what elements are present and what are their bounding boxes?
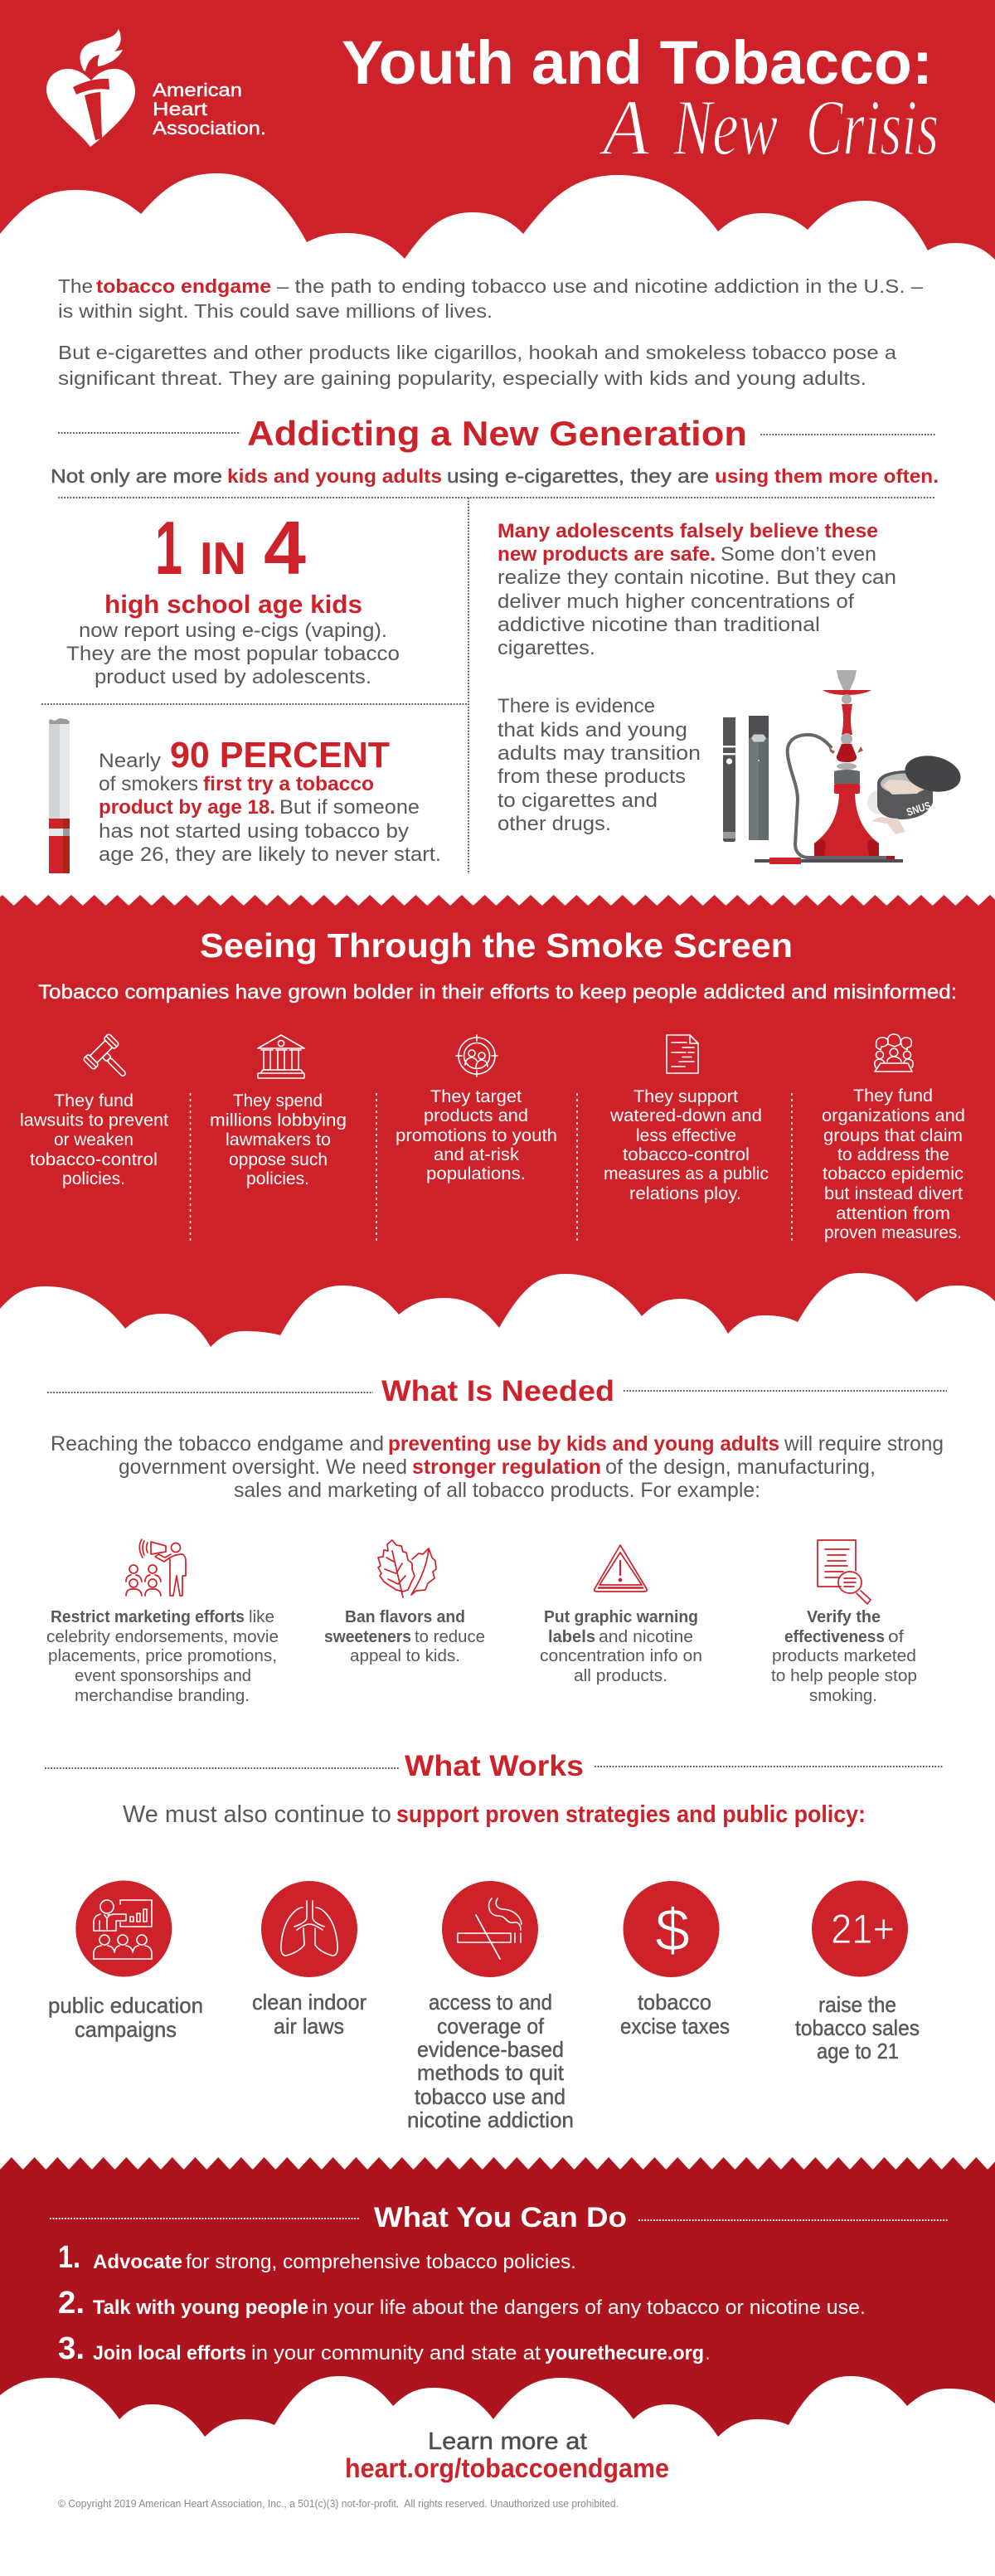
panel: seeing through the smoke screen (0, 895, 995, 1360)
text: column 5: groups that claim (823, 1126, 963, 1145)
list item 1 (58, 2240, 576, 2275)
text: graphic warning labels: and nicotine (599, 1628, 693, 1646)
text: column 2: policies. (246, 1169, 309, 1188)
subheading: using them more often. (715, 465, 939, 487)
icon: dollar circle (624, 1881, 720, 1977)
stat: 90 percent: product by age 18. (99, 796, 275, 819)
intro text: The (58, 275, 93, 297)
text: what works intro: We must also continue to (123, 1801, 391, 1828)
icon: target on people (456, 1035, 498, 1077)
text: column 1: tobacco-control (30, 1150, 158, 1169)
label: clean indoor air laws (252, 1990, 366, 2039)
list item 3: in your community and state at (251, 2342, 541, 2365)
icon: 21+ circle: 21+ (831, 1906, 895, 1952)
text: column 3: They target (430, 1087, 522, 1106)
label: access to quit methods: evidence-based (417, 2037, 564, 2062)
stat: 1 in 4: 1 (155, 507, 182, 591)
subheading: Tobacco companies have grown bolder in their efforts to keep people addicted and misinformed: (38, 981, 957, 1004)
label: raise sales age: tobacco sales (795, 2015, 920, 2040)
stat: 90 percent: of smokers (99, 773, 198, 795)
text: restrict marketing: like (249, 1608, 274, 1626)
text: column 5: but instead divert (824, 1184, 963, 1203)
logo: American Heart Association: Association. (153, 118, 266, 139)
icon: no smoking circle (442, 1881, 538, 1977)
label: raise sales age: age to 21 (817, 2039, 899, 2063)
text: ban flavors (324, 1608, 485, 1665)
text: column 3: products and (424, 1106, 528, 1125)
intro text: is within sight. This could save millions of lives. (58, 300, 493, 322)
stat: 1 in 4: They are the most popular tobacco (66, 643, 400, 665)
text: column 3: populations. (426, 1164, 526, 1184)
label: raise sales age (795, 1992, 920, 2063)
copyright: © Copyright 2019 American Heart Association, Inc., a 501(c)(3) not-for-profit. All rights reserved. Unauthorized use prohibited. (58, 2498, 619, 2510)
text: column 2: millions lobbying (210, 1111, 347, 1130)
logo: American Heart Association: American (153, 80, 242, 100)
text: graphic warning labels: concentration info on (540, 1647, 702, 1665)
text: what is needed intro: stronger regulation (412, 1456, 601, 1479)
list item 3: Join local efforts (93, 2342, 246, 2365)
text: false beliefs: cigarettes. (498, 637, 595, 659)
text: what is needed intro (51, 1432, 944, 1502)
title: New (672, 83, 778, 172)
icon: snus tin: SNUS (905, 799, 933, 819)
text: false beliefs (498, 520, 896, 659)
label: access to quit methods: coverage of (437, 2014, 545, 2039)
text: column 4: tobacco-control (623, 1145, 750, 1164)
text: verify effectiveness: Verify the (807, 1608, 881, 1626)
logo: American Heart Association: Heart (153, 99, 207, 119)
text: ban flavors: sweeteners (324, 1628, 411, 1646)
list item 1: for strong, comprehensive tobacco policies. (186, 2251, 576, 2273)
icon: gavel (83, 1033, 138, 1088)
text: column 5: proven measures. (824, 1223, 962, 1242)
text: restrict marketing (46, 1608, 279, 1705)
header banner (0, 0, 995, 274)
text: column 2: They spend (233, 1091, 323, 1111)
label: access to quit methods: access to and (429, 1990, 552, 2015)
text: what is needed intro: sales and marketing of all tobacco products. For example: (234, 1479, 760, 1502)
label: access to quit methods: tobacco use and (415, 2084, 565, 2109)
list item 2: 2. (58, 2286, 85, 2321)
text: false beliefs: new products are safe. (498, 543, 716, 566)
illustration: vape pens, hookah and snus tin (723, 670, 964, 864)
icon: vape pen (723, 717, 735, 842)
stat: 90 percent (99, 735, 441, 866)
text: column 3 (396, 1087, 557, 1184)
list item 1: Advocate (93, 2251, 182, 2273)
subheading: kids and young adults (227, 465, 442, 487)
label: access to quit methods (407, 1990, 574, 2132)
text: graphic warning labels: labels (548, 1628, 595, 1646)
text: column 5: They fund (853, 1086, 933, 1106)
text: verify effectiveness: of (888, 1628, 904, 1646)
list item 3: 3. (58, 2331, 85, 2366)
text: transition evidence: from these products (498, 766, 686, 788)
text: restrict marketing: Restrict marketing efforts (51, 1608, 245, 1626)
background with zigzag top and cloud bottom (0, 2157, 995, 2455)
text: verify effectiveness: effectiveness (784, 1628, 885, 1646)
icon: pod vape (749, 716, 769, 840)
stat: 90 percent: has not started using tobacco by (99, 820, 409, 843)
intro text: significant threat. They are gaining popularity, especially with kids and young adults. (58, 367, 866, 389)
column dividers (191, 1093, 792, 1242)
list item 3 (58, 2331, 710, 2366)
heading: What You Can Do (374, 2202, 627, 2233)
text: graphic warning labels (540, 1608, 702, 1685)
text: column 1: or weaken (54, 1130, 133, 1149)
stat: 1 in 4 (66, 507, 400, 688)
text: transition evidence: adults may transition (498, 742, 701, 765)
heading: Seeing Through the Smoke Screen (200, 926, 793, 965)
text: what is needed intro: Reaching the tobacco endgame and (51, 1432, 384, 1456)
subheading: Not only are more (51, 465, 222, 487)
text: ban flavors: Ban flavors and (345, 1608, 465, 1626)
label: tobacco excise taxes: tobacco (638, 1990, 711, 2015)
text: false beliefs: Many adolescents falsely believe these (498, 520, 878, 542)
list item 3: yourethecure.org (545, 2342, 704, 2365)
text: false beliefs: deliver much higher concentrations of (498, 591, 854, 613)
text: column 4: less effective (636, 1126, 736, 1145)
text: transition evidence: There is evidence (498, 695, 655, 717)
icon: lungs circle (261, 1881, 357, 1977)
text: column 1 (20, 1091, 168, 1188)
intro text: tobacco endgame (96, 275, 271, 297)
text: column 3: and at-risk (434, 1145, 520, 1164)
label: access to quit methods: methods to quit (417, 2060, 565, 2085)
panel: what you can do (0, 2157, 995, 2455)
text: verify effectiveness: products marketed (772, 1647, 916, 1665)
heading: What Works: What Works (405, 1750, 584, 1782)
icon: warning triangle (595, 1545, 647, 1592)
list item 3: . (706, 2342, 710, 2365)
text: verify effectiveness: to help people stop (771, 1667, 917, 1685)
icon: group at table (875, 1034, 913, 1072)
stat: 1 in 4: now report using e-cigs (vaping). (79, 620, 387, 642)
stat: 1 in 4: IN (200, 532, 246, 584)
text: column 4: They support (633, 1087, 738, 1106)
text: verify effectiveness (771, 1608, 917, 1705)
intro text: – the path to ending tobacco use and nicotine addiction in the U.S. – (277, 275, 923, 297)
learn more call to action (345, 2428, 669, 2483)
icon: hookah (755, 670, 903, 864)
list item 1: 1. (58, 2240, 80, 2275)
title: Crisis (806, 83, 939, 172)
heading: What Is Needed: What Is Needed (381, 1375, 614, 1407)
stat: 90 percent: first try a tobacco (203, 773, 374, 795)
text: transition evidence (498, 695, 701, 835)
icon: snus tin (867, 751, 964, 834)
text: verify effectiveness: smoking. (809, 1687, 877, 1705)
label: raise sales age: raise the (818, 1992, 896, 2017)
text: transition evidence: other drugs. (498, 813, 611, 835)
text: column 5: attention from (836, 1204, 950, 1223)
text: column 2: lawmakers to (226, 1130, 331, 1149)
text: graphic warning labels: Put graphic warning (544, 1608, 698, 1626)
text: column 1: They fund (54, 1091, 133, 1111)
logo: American Heart Association (46, 29, 266, 147)
label: public education campaigns (48, 1993, 203, 2042)
stat: 1 in 4: 4 (264, 507, 306, 591)
text: column 4: relations ploy. (629, 1184, 741, 1203)
title: Youth and Tobacco: (342, 28, 933, 97)
icon: tobacco leaves (378, 1540, 436, 1597)
text: transition evidence: to cigarettes and (498, 790, 658, 812)
list item 2: in your life about the dangers of any tobacco or nicotine use. (312, 2297, 866, 2319)
learn more call to action: heart.org/tobaccoendgame (345, 2453, 669, 2483)
stat: 1 in 4: high school age kids (104, 590, 362, 619)
icon: verify document (818, 1540, 871, 1604)
stat: 1 in 4: product used by adolescents. (95, 666, 371, 688)
text: what works intro (123, 1801, 866, 1828)
background with zigzag top and cloud bottom (0, 895, 995, 1360)
intro text: But e-cigarettes and other products like cigarillos, hookah and smokeless tobacco pose a (58, 342, 896, 363)
text: column 2 (210, 1091, 347, 1188)
title: A (598, 83, 649, 172)
text: restrict marketing: celebrity endorsements, movie (46, 1628, 279, 1646)
label: tobacco excise taxes (620, 1990, 730, 2039)
icon: government building (258, 1035, 304, 1078)
text: what is needed intro: government oversight. We need (119, 1456, 407, 1479)
text: false beliefs: addictive nicotine than traditional (498, 614, 820, 636)
subheading (51, 465, 939, 487)
text: what is needed intro: will require strong (784, 1432, 944, 1456)
text: false beliefs: realize they contain nicotine. But they can (498, 566, 896, 589)
text: ban flavors: to reduce (415, 1628, 485, 1646)
label: clean indoor air laws: air laws (274, 2014, 344, 2039)
learn more call to action: Learn more at (428, 2428, 587, 2455)
text: column 5 (822, 1086, 965, 1242)
intro text (58, 275, 923, 389)
panel dividers (41, 498, 935, 874)
stat: 90 percent: But if someone (279, 796, 420, 819)
text: column 1: policies. (62, 1169, 125, 1188)
text: what is needed intro: of the design, manufacturing, (605, 1456, 876, 1479)
label: public education campaigns: campaigns (75, 2017, 177, 2042)
text: column 5: organizations and (822, 1106, 965, 1125)
label: clean indoor air laws: clean indoor (252, 1990, 366, 2015)
stat: 90 percent: age 26, they are likely to never start. (99, 843, 441, 866)
text: restrict marketing: placements, price promotions, (48, 1647, 277, 1665)
icon: 21+ circle (812, 1881, 908, 1977)
label: access to quit methods: nicotine addiction (407, 2107, 574, 2132)
text: restrict marketing: event sponsorships and (75, 1667, 251, 1685)
text: false beliefs: Some don’t even (721, 543, 876, 566)
text: column 1: lawsuits to prevent (20, 1111, 168, 1130)
list item 2: Talk with young people (93, 2297, 308, 2319)
text: column 4: watered-down and (609, 1106, 762, 1125)
stat: 90 percent: Nearly (99, 750, 161, 772)
label: tobacco excise taxes: excise taxes (620, 2014, 730, 2039)
text: column 2: oppose such (229, 1150, 328, 1169)
label: public education campaigns: public education (48, 1993, 203, 2018)
text: graphic warning labels: all products. (574, 1667, 667, 1685)
icon: cigarette (49, 718, 70, 873)
text: what works intro: support proven strategies and public policy: (396, 1801, 866, 1828)
text: column 5: to address the (837, 1145, 949, 1164)
list item 2 (58, 2286, 866, 2321)
stat: 90 percent: 90 PERCENT (170, 735, 390, 775)
text: column 4: measures as a public (604, 1164, 769, 1184)
subheading: using e-cigarettes, they are (447, 465, 709, 487)
icon: dollar circle: $ (655, 1898, 690, 1964)
text: transition evidence: that kids and young (498, 719, 687, 741)
text: column 4 (604, 1087, 769, 1203)
heading: Addicting a New Generation: Addicting a New Generation (247, 414, 747, 453)
text: column 3: promotions to youth (396, 1126, 557, 1145)
text: restrict marketing: merchandise branding. (75, 1687, 250, 1705)
text: column 5: tobacco epidemic (823, 1164, 963, 1184)
icon: public education circle (75, 1881, 172, 1977)
text: ban flavors: appeal to kids. (350, 1647, 460, 1665)
title (342, 28, 939, 172)
icon: restrict marketing (126, 1539, 186, 1596)
icon: document (667, 1035, 698, 1073)
text: what is needed intro: preventing use by kids and young adults (388, 1432, 779, 1456)
